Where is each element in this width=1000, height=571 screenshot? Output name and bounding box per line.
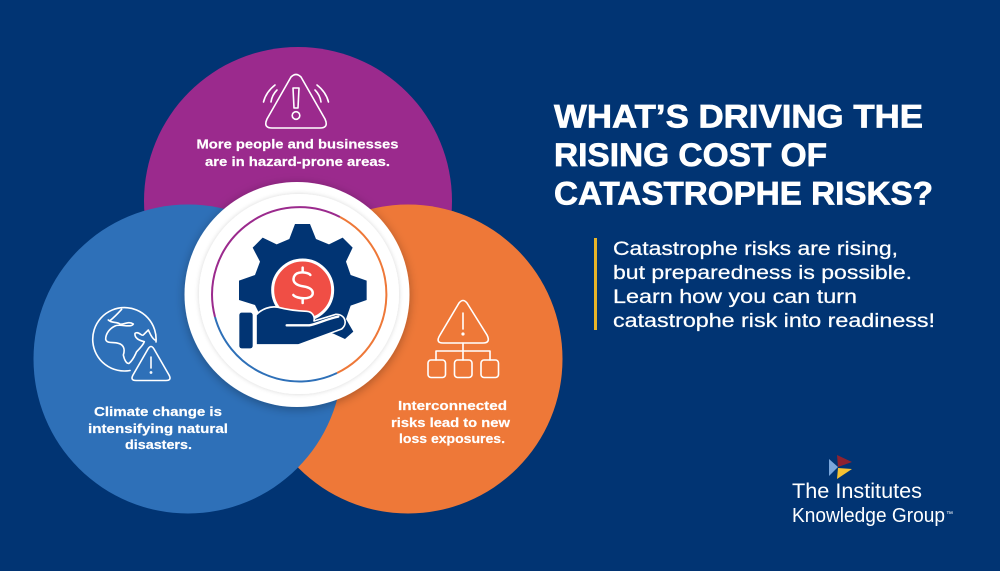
dollar sign: [293, 268, 313, 303]
icon: warning triangle with vibration marks: [264, 74, 328, 128]
text: climate change: [88, 404, 228, 452]
finger crease: [287, 317, 338, 325]
hand outline correction: [254, 344, 298, 348]
text: more people: are in hazard-prone areas.: [205, 154, 390, 169]
icon: globe with warning triangle: [93, 308, 170, 380]
cuff: [239, 313, 253, 348]
text: interconnected risks: loss exposures.: [399, 431, 505, 446]
text: climate change: Climate change is: [94, 404, 222, 419]
text block: intro: Catastrophe risks are rising,: [613, 238, 898, 260]
hand: [256, 307, 345, 345]
text block: intro: catastrophe risk into readiness!: [613, 310, 935, 332]
text: interconnected risks: risks lead to new: [391, 415, 511, 430]
panel: central white badge: [184, 182, 410, 407]
gear: [239, 224, 367, 339]
text: more people: [196, 136, 398, 169]
text: interconnected risks: [391, 398, 511, 446]
text: more people: More people and businesses: [196, 136, 398, 152]
title: [554, 98, 933, 212]
panel: orange circle: [254, 204, 562, 514]
coin: [273, 260, 333, 320]
text block: intro: but preparedness is possible.: [613, 262, 912, 284]
title: RISING COST OF: [554, 137, 827, 173]
logo: The Institutes Knowledge Group: The Institutes: [792, 480, 922, 503]
panel: purple circle: [144, 47, 452, 355]
panel: blue circle: [34, 204, 342, 514]
accent bar: [594, 238, 597, 330]
text: climate change: intensifying natural: [88, 421, 228, 436]
title: CATASTROPHE RISKS?: [554, 176, 933, 212]
text block: intro: [613, 238, 935, 332]
title: WHAT’S DRIVING THE: [554, 98, 923, 134]
logo: The Institutes Knowledge Group: [792, 455, 953, 527]
icon: logo triangles: [829, 455, 852, 479]
text block: intro: Learn how you can turn: [613, 286, 857, 308]
ring: tri-colour: [212, 207, 386, 381]
text: interconnected risks: Interconnected: [398, 398, 507, 413]
logo: The Institutes Knowledge Group: ™: [946, 511, 953, 518]
icon: gear with coin and hand: [239, 224, 367, 348]
text: climate change: disasters.: [125, 437, 192, 452]
icon: warning triangle with connected boxes: [428, 300, 498, 378]
logo: The Institutes Knowledge Group: Knowledge Group: [792, 505, 945, 527]
